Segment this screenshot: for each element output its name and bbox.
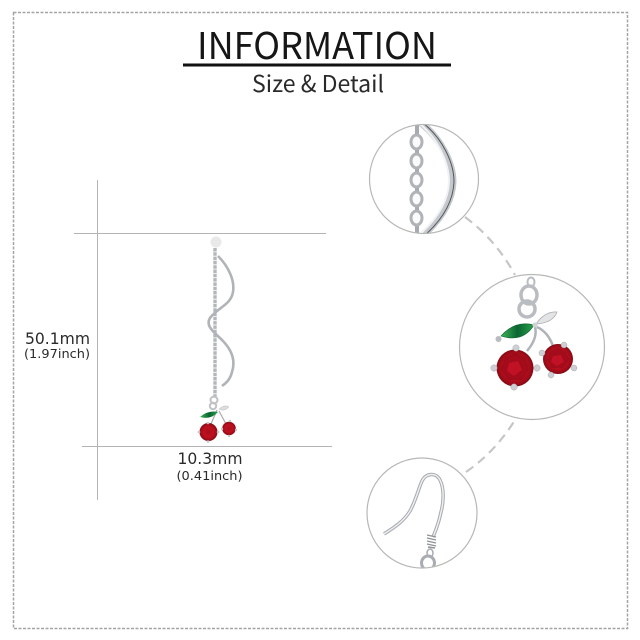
chain links: [519, 278, 537, 317]
prongs: [491, 342, 577, 390]
detail circle: chain and wire: [370, 123, 478, 236]
silver leaf: [536, 312, 557, 324]
stems: [527, 327, 553, 351]
width label: [176, 449, 242, 483]
dimension lines: [74, 180, 332, 500]
detail circle: cherries: [460, 274, 604, 420]
small ruby: [543, 344, 573, 374]
detail circle: ear hook: [367, 458, 477, 570]
height label: (1.97inch): [24, 346, 90, 361]
height label: 50.1mm: [25, 329, 90, 348]
subtitle: Size & Detail: [252, 65, 384, 99]
large ruby: [496, 350, 534, 386]
green leaf: [501, 324, 534, 338]
width label: 10.3mm: [178, 449, 242, 468]
title underline: [183, 64, 451, 66]
earring full view: [198, 236, 237, 443]
title: INFORMATION: [197, 16, 437, 70]
height label: [24, 329, 90, 361]
connector: bottom dashed arc: [466, 420, 515, 472]
connector: top dashed arc: [465, 217, 515, 275]
width label: (0.41inch): [176, 468, 242, 483]
